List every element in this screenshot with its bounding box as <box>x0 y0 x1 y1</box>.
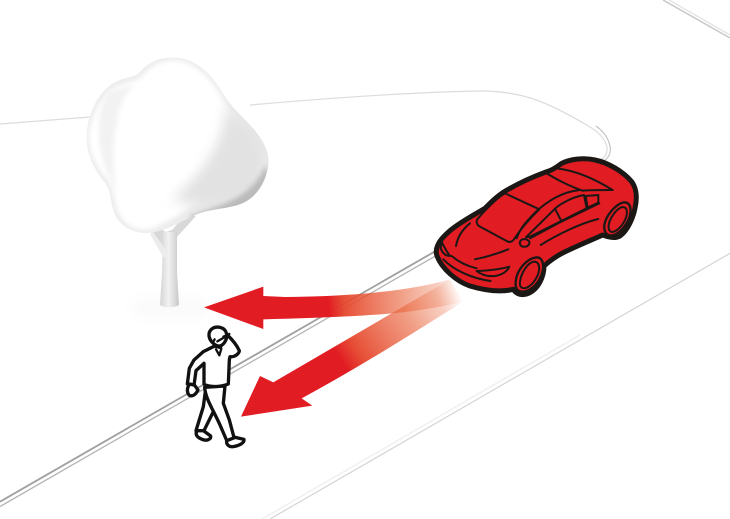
pedestrian on phone <box>187 327 244 447</box>
hood creases <box>456 223 508 259</box>
head <box>209 327 227 346</box>
road edge: lower right line <box>262 253 730 519</box>
door crease <box>541 219 598 245</box>
face and phone <box>213 334 229 355</box>
arrow: toward tree <box>204 279 463 329</box>
front leg <box>205 386 235 442</box>
tree <box>87 58 278 320</box>
rear foot <box>196 431 211 440</box>
mirror <box>520 239 529 247</box>
tree ground shadow <box>128 296 212 320</box>
road edge: far kerb curve <box>0 91 610 166</box>
front foot <box>227 437 244 447</box>
road edge: top right corner <box>663 0 730 38</box>
headlight and front details <box>441 242 450 256</box>
rear wheel <box>604 202 631 235</box>
windshield <box>477 193 539 242</box>
tree crown <box>87 58 278 233</box>
road edge: near kerb double line <box>0 251 438 506</box>
front wheel <box>516 257 543 292</box>
red car <box>436 159 636 295</box>
arrow: toward pedestrian <box>241 279 463 417</box>
rear leg <box>196 387 220 433</box>
tree trunk and branches <box>150 214 196 307</box>
car body <box>436 159 636 295</box>
hand at hip <box>187 384 198 396</box>
roof and rear glass lines <box>517 168 613 238</box>
torso and arm <box>187 335 239 386</box>
car window and body lines <box>441 168 631 292</box>
belt line <box>530 190 613 238</box>
side windows <box>526 195 598 237</box>
